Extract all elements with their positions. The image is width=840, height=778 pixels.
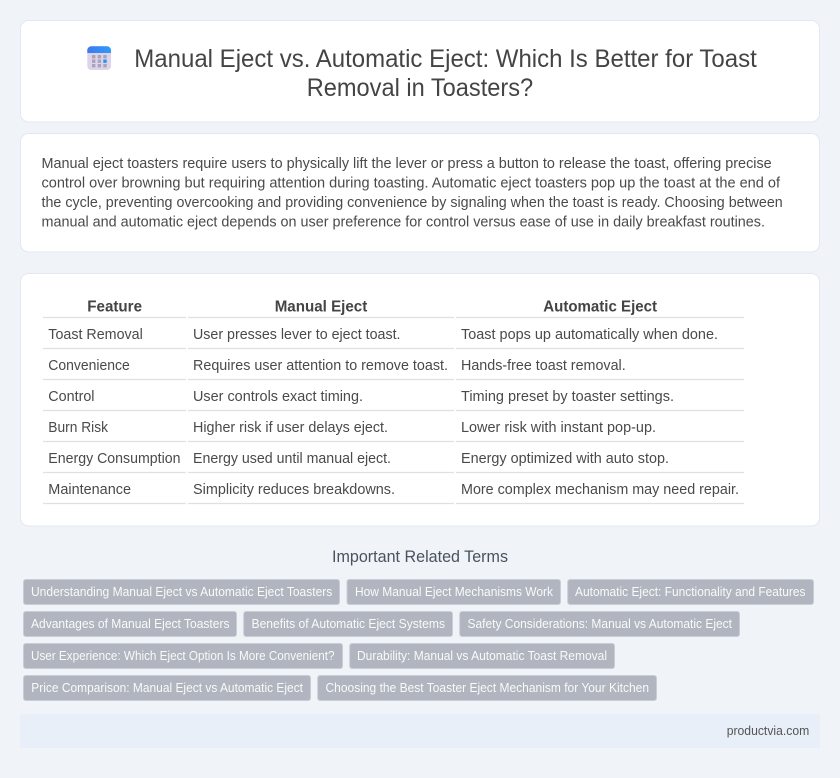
table header bbox=[87, 298, 658, 316]
table header: Feature bbox=[87, 298, 142, 316]
row: control: Timing preset by toaster settings. bbox=[461, 389, 674, 405]
table header: Manual Eject bbox=[275, 298, 368, 316]
text block: summary paragraph: manual and automatic eject depends on user preference for control versus ease of use in daily breakfast routines. bbox=[42, 214, 765, 230]
tag bbox=[318, 676, 656, 700]
row: maintenance: Maintenance bbox=[48, 482, 131, 498]
row: burn risk: Lower risk with instant pop-up. bbox=[461, 420, 656, 436]
tag: User Experience: Which Eject Option Is More Convenient? bbox=[31, 649, 335, 663]
tag: Automatic Eject: Functionality and Features bbox=[575, 585, 806, 599]
tag bbox=[244, 612, 452, 636]
related term tags bbox=[24, 580, 814, 700]
panel: summary bbox=[20, 134, 820, 252]
row: toast removal: Toast pops up automatically when done. bbox=[461, 327, 718, 343]
tag: Safety Considerations: Manual vs Automatic Eject bbox=[468, 617, 732, 631]
text block: summary paragraph: Manual eject toasters require users to physically lift the lever or press a button to release the toast, offering precise bbox=[42, 156, 772, 172]
row: convenience bbox=[48, 358, 626, 374]
tag: Advantages of Manual Eject Toasters bbox=[31, 617, 230, 631]
row: toast removal bbox=[48, 327, 718, 343]
row: energy consumption: Energy optimized with auto stop. bbox=[461, 451, 669, 467]
text block: summary paragraph bbox=[42, 156, 783, 230]
row: control bbox=[48, 389, 674, 405]
heading: important related terms: Important Related Terms bbox=[332, 548, 508, 566]
tag: Price Comparison: Manual Eject vs Automatic Eject bbox=[31, 681, 303, 695]
title: Manual Eject vs. Automatic Eject: Which Is Better for Toast bbox=[134, 45, 757, 73]
tag: Choosing the Best Toaster Eject Mechanism for Your Kitchen bbox=[326, 681, 649, 695]
tag: How Manual Eject Mechanisms Work bbox=[355, 585, 554, 599]
panel: header bbox=[20, 20, 820, 122]
tag bbox=[350, 644, 614, 668]
row: maintenance: Simplicity reduces breakdowns. bbox=[193, 482, 395, 498]
tag: Durability: Manual vs Automatic Toast Removal bbox=[357, 649, 607, 663]
row: control: Control bbox=[48, 389, 94, 405]
icon: calendar bbox=[87, 46, 111, 70]
row: burn risk: Burn Risk bbox=[48, 420, 109, 436]
row: burn risk: Higher risk if user delays eject. bbox=[193, 420, 388, 436]
row: maintenance: More complex mechanism may need repair. bbox=[461, 482, 739, 498]
tag bbox=[568, 580, 814, 604]
row: maintenance bbox=[48, 482, 739, 498]
footer source text: productvia.com bbox=[727, 724, 809, 738]
row: toast removal: User presses lever to eject toast. bbox=[193, 327, 400, 343]
row: convenience: Convenience bbox=[48, 358, 130, 374]
text block: summary paragraph: the cycle, preventing overcooking and providing convenience by signaling when the toast is ready. Choosing between bbox=[42, 195, 783, 211]
panel: comparison table bbox=[20, 274, 820, 526]
row: convenience: Requires user attention to remove toast. bbox=[193, 358, 448, 374]
tag bbox=[24, 612, 236, 636]
table header: Automatic Eject bbox=[543, 298, 658, 316]
tag bbox=[347, 580, 560, 604]
tag: Understanding Manual Eject vs Automatic Eject Toasters bbox=[31, 585, 332, 599]
title: Removal in Toasters? bbox=[307, 74, 533, 102]
tag bbox=[24, 644, 342, 668]
tag bbox=[24, 676, 310, 700]
text block: summary paragraph: control over browning but requiring attention during toasting. Automatic eject toasters pop up the toast at the end of bbox=[42, 175, 781, 191]
row: energy consumption: Energy used until manual eject. bbox=[193, 451, 391, 467]
row: energy consumption bbox=[48, 451, 669, 467]
row: convenience: Hands-free toast removal. bbox=[461, 358, 626, 374]
tag: Benefits of Automatic Eject Systems bbox=[252, 617, 445, 631]
row: control: User controls exact timing. bbox=[193, 389, 363, 405]
footer bbox=[20, 714, 820, 748]
tag bbox=[460, 612, 740, 636]
row: burn risk bbox=[48, 420, 656, 436]
tag bbox=[24, 580, 340, 604]
row: toast removal: Toast Removal bbox=[48, 327, 143, 343]
title bbox=[134, 45, 757, 102]
row: energy consumption: Energy Consumption bbox=[48, 451, 180, 467]
